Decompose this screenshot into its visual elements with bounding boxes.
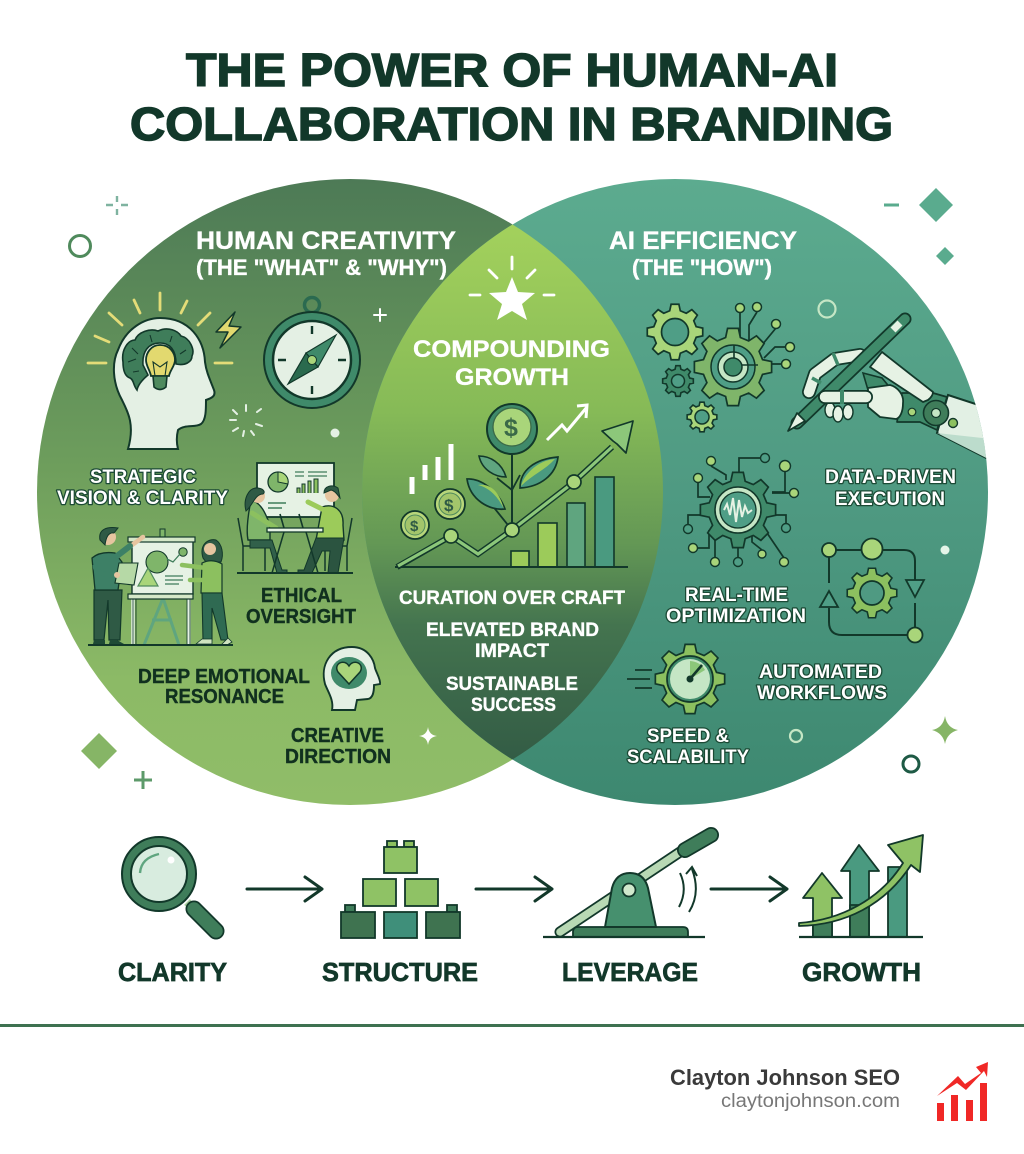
icon: growth arrows chart: [799, 835, 923, 937]
label: data-driven execution: [825, 467, 956, 510]
decorative dots in AI circle: [940, 546, 950, 554]
chart: growth plant with coins, bars and arrow: $: [504, 414, 518, 442]
decorative ring in AI circle: [818, 300, 836, 318]
label: deep emotional resonance: [138, 666, 310, 708]
icon: red growth logo: [937, 1062, 988, 1121]
label: data-driven execution: DATA-DRIVEN: [825, 467, 956, 488]
sparkle and dots in left circle: [230, 309, 437, 745]
text: elevated brand impact: IMPACT: [475, 641, 549, 662]
heading: AI efficiency: (THE "HOW"): [632, 255, 772, 280]
label: automated workflows: [757, 662, 887, 704]
heading: compounding growth: COMPOUNDING: [413, 336, 610, 363]
icon: head with heart: [324, 647, 380, 710]
icon: magnifying glass: [122, 837, 216, 931]
icon: lever: [543, 835, 711, 937]
label: real-time optimization: OPTIMIZATION: [666, 606, 806, 627]
footer divider: [0, 1024, 1024, 1027]
label: real-time optimization: [666, 585, 806, 627]
label: growth: GROWTH: [802, 957, 921, 987]
label: ethical oversight: OVERSIGHT: [246, 606, 356, 628]
label: ethical oversight: ETHICAL: [261, 585, 342, 607]
heading: human creativity: [196, 227, 456, 280]
heading: compounding growth: [413, 336, 610, 391]
text: elevated brand impact: [426, 620, 599, 662]
icon: automated workflow loop with gear: [820, 538, 924, 642]
icon: star with rays: [470, 257, 554, 320]
footer brand text: [670, 1065, 900, 1112]
label: automated workflows: AUTOMATED: [759, 662, 882, 683]
decorative ring, lower AI circle: [790, 730, 802, 742]
arrow: leverage to growth: [711, 877, 787, 901]
illustration: team at the presentation board: [237, 463, 353, 573]
label: clarity: CLARITY: [118, 957, 227, 987]
icon: head with brain and light bulb: [88, 293, 241, 449]
arrow: clarity to structure: [247, 877, 322, 901]
text: curation over craft: CURATION OVER CRAFT: [399, 588, 625, 609]
label: strategic vision and clarity: STRATEGIC: [90, 466, 196, 488]
icon: stacked building blocks: [341, 841, 460, 938]
title: THE POWER OF HUMAN-AI: [186, 44, 838, 96]
heading: human creativity: (THE "WHAT" & "WHY"): [196, 255, 447, 280]
text: elevated brand impact: ELEVATED BRAND: [426, 620, 599, 641]
heading: AI efficiency: [609, 227, 797, 280]
label: creative direction: DIRECTION: [285, 746, 391, 768]
title: COLLABORATION IN BRANDING: [130, 98, 893, 150]
heading: AI efficiency: AI EFFICIENCY: [609, 227, 797, 255]
icon: gears with circuits: [647, 302, 794, 432]
text: sustainable success: [446, 674, 578, 716]
label: strategic vision and clarity: VISION & CLARITY: [57, 487, 228, 509]
label: structure: STRUCTURE: [322, 957, 478, 987]
label: real-time optimization: REAL-TIME: [685, 585, 788, 606]
icon: robot hand holding a pencil: [788, 319, 1000, 465]
icon: speed gauge gear: [627, 644, 725, 714]
title: [130, 44, 893, 150]
label: automated workflows: WORKFLOWS: [757, 683, 887, 704]
panel: compounding growth overlap: [362, 224, 663, 760]
icon: circuit gear with waveform: [684, 454, 798, 566]
heading: human creativity: HUMAN CREATIVITY: [196, 227, 456, 255]
chart: growth plant with coins, bars and arrow: $: [444, 496, 454, 515]
label: deep emotional resonance: DEEP EMOTIONAL: [138, 666, 310, 688]
label: ethical oversight: [246, 585, 356, 628]
label: speed and scalability: [627, 726, 749, 768]
panel: AI efficiency circle: [362, 179, 988, 805]
heading: compounding growth: GROWTH: [455, 364, 569, 391]
label: speed and scalability: SCALABILITY: [627, 747, 749, 768]
label: data-driven execution: EXECUTION: [835, 489, 945, 510]
label: deep emotional resonance: RESONANCE: [165, 686, 284, 708]
chart: growth plant with coins, bars and arrow: $: [410, 518, 419, 535]
label: leverage: LEVERAGE: [562, 957, 698, 987]
decorative accents outside the circles: [70, 188, 958, 789]
label: strategic vision and clarity: [57, 466, 228, 509]
text: sustainable success: SUSTAINABLE: [446, 674, 578, 695]
text: sustainable success: SUCCESS: [471, 695, 556, 716]
label: creative direction: [285, 725, 391, 768]
icon: compass: [264, 298, 360, 408]
arrow: structure to leverage: [476, 877, 552, 901]
illustration: brainstorm at the easel: [88, 528, 233, 645]
chart: growth plant with coins, bars and arrow: [395, 404, 633, 567]
label: speed and scalability: SPEED &: [647, 726, 729, 747]
footer brand text: Clayton Johnson SEO: [670, 1065, 900, 1090]
label: creative direction: CREATIVE: [291, 725, 384, 747]
footer brand text: claytonjohnson.com: [721, 1091, 900, 1112]
panel: human creativity circle: [37, 179, 663, 805]
